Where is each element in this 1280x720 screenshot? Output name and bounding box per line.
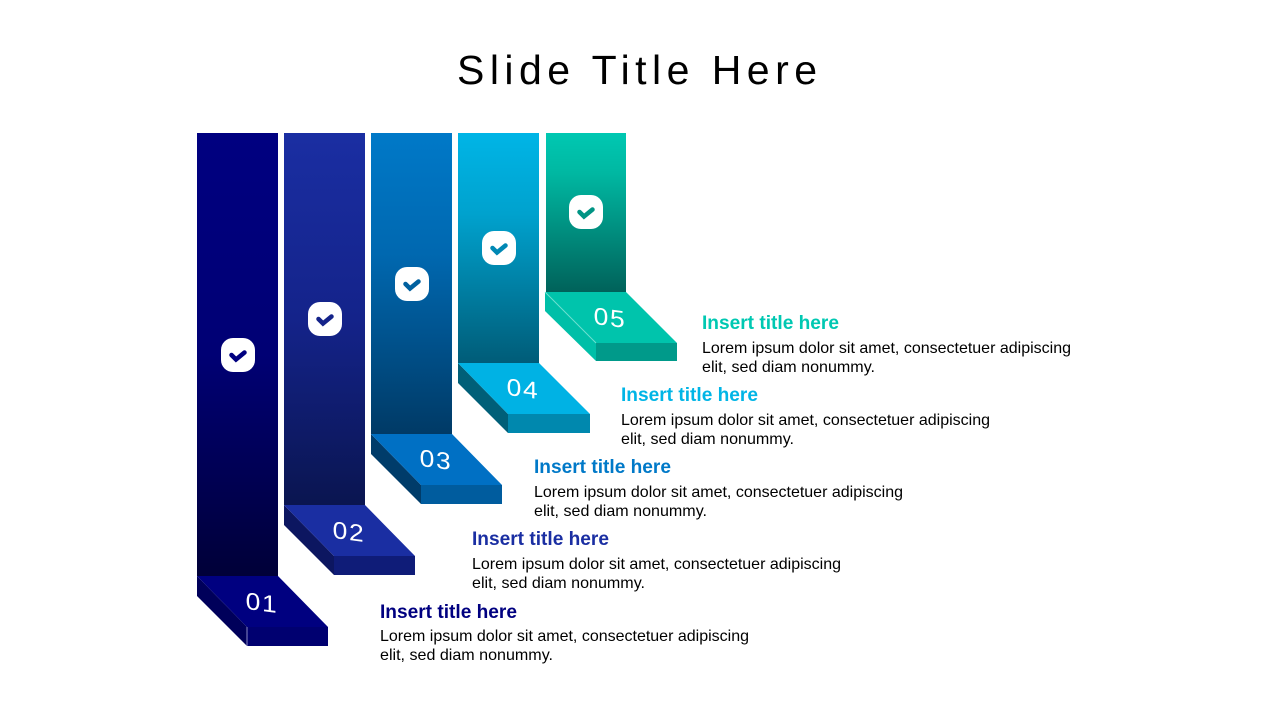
- text block 05: [702, 313, 1071, 376]
- icon: check 01: [221, 338, 255, 372]
- text block 05: Insert title here: [702, 313, 839, 334]
- column 02 foot: [284, 505, 415, 575]
- column 03: [371, 133, 502, 504]
- text block 05: Lorem ipsum dolor sit amet, consectetuer adipiscing: [702, 340, 1071, 357]
- column 03 bar: [371, 133, 452, 434]
- number 03: 03: [420, 445, 452, 476]
- column 04 foot: [458, 363, 590, 433]
- icon: check 02: [308, 302, 342, 336]
- text block 05: elit, sed diam nonummy.: [702, 359, 875, 376]
- column 01: [197, 133, 328, 646]
- text block 04: Lorem ipsum dolor sit amet, consectetuer adipiscing: [621, 412, 990, 429]
- column 01 foot: [197, 576, 328, 646]
- column 05 foot: [545, 292, 677, 361]
- text block 01: Insert title here: [380, 602, 517, 623]
- column 01 bar: [197, 133, 278, 576]
- text block 02: Lorem ipsum dolor sit amet, consectetuer adipiscing: [472, 556, 841, 573]
- number 02: 02: [333, 517, 365, 548]
- text block 02: Insert title here: [472, 529, 609, 550]
- column 04: [458, 133, 590, 433]
- column 02 bar: [284, 133, 365, 505]
- text block 02: [472, 529, 841, 592]
- number 04: 04: [507, 374, 539, 405]
- text block 04: Insert title here: [621, 385, 758, 406]
- number 01: 01: [246, 588, 278, 619]
- icon: check 05: [569, 195, 603, 229]
- text block 02: elit, sed diam nonummy.: [472, 575, 645, 592]
- icon: check 04: [482, 231, 516, 265]
- text block 03: Lorem ipsum dolor sit amet, consectetuer adipiscing: [534, 484, 903, 501]
- text block 03: Insert title here: [534, 457, 671, 478]
- text block 01: elit, sed diam nonummy.: [380, 647, 553, 664]
- text block 03: [534, 457, 903, 520]
- column 05: [545, 133, 677, 361]
- column 02: [284, 133, 415, 575]
- column 05 bar: [546, 133, 626, 292]
- column 03 foot: [371, 434, 502, 504]
- text block 04: elit, sed diam nonummy.: [621, 431, 794, 448]
- title: Slide Title Here: [457, 47, 817, 93]
- text block 04: [621, 385, 990, 448]
- column 04 bar: [458, 133, 539, 363]
- icon: check 03: [395, 267, 429, 301]
- text block 03: elit, sed diam nonummy.: [534, 503, 707, 520]
- number 05: 05: [594, 303, 626, 334]
- text block 01: Lorem ipsum dolor sit amet, consectetuer adipiscing: [380, 628, 749, 645]
- text block 01: [380, 602, 749, 664]
